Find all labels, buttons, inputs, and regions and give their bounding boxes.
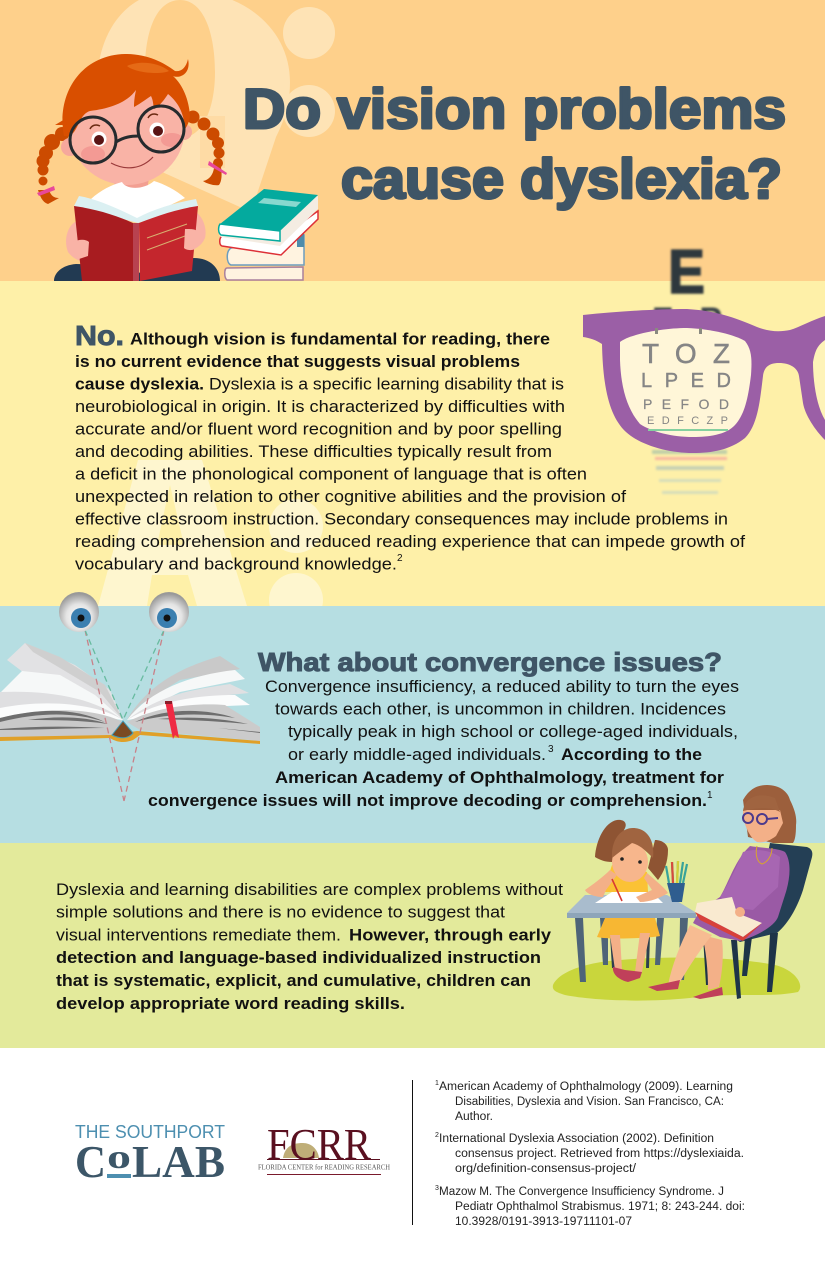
eye chart letters in lens: TOZ [642, 338, 730, 369]
references: consensus project. Retrieved from https://dyslexiaida. [455, 1148, 744, 1160]
references: Disabilities, Dyslexia and Vision. San Francisco, CA: [455, 1096, 724, 1108]
left braid [36, 127, 69, 204]
text block: convergence: typically peak in high school or college-aged individuals, [288, 722, 738, 741]
text block: answer: reading comprehension and reduced reading experience that can impede growth of [75, 532, 745, 551]
child legs [610, 933, 650, 972]
teacher book [695, 897, 762, 937]
teacher glasses [743, 813, 778, 824]
teacher shoes [648, 980, 723, 999]
title: Do vision problems [243, 77, 786, 140]
smile [111, 157, 153, 168]
panel: answer body background [0, 281, 825, 627]
teacher hair [743, 785, 796, 843]
text block: conclusion: However, through early [349, 926, 552, 944]
references: 3 [435, 1185, 439, 1192]
logo: FCRR: FCRR [267, 1120, 372, 1169]
text block: conclusion: simple solutions and there is no evidence to suggest that [56, 902, 505, 922]
chair back [720, 843, 812, 942]
references: 1 [435, 1080, 439, 1087]
eyes [92, 132, 106, 146]
logo: The Southport CoLab: THE SOUTHPORT [75, 1122, 225, 1142]
references: Author. [455, 1111, 493, 1123]
text block: conclusion [56, 880, 563, 1013]
book spine and edge [0, 731, 260, 744]
child dress top [603, 865, 648, 892]
title: cause dyslexia? [341, 147, 782, 210]
text block: answer: cause dyslexia. [75, 374, 204, 394]
child shoes [613, 967, 642, 982]
child head [612, 842, 648, 882]
text block: answer: Dyslexia is a specific learning disability that is [209, 374, 564, 394]
text block: answer: vocabulary and background knowledge. [75, 554, 397, 574]
left eyeball [59, 592, 99, 632]
eye chart letters in lens: EDFCZP [647, 415, 728, 427]
references: Pediatr Ophthalmol Strabismus. 1971; 8: 243-244. doi: [455, 1201, 745, 1213]
blush [81, 146, 105, 162]
text block: answer: Although vision is fundamental for reading, there [130, 330, 550, 348]
text block: convergence: convergence issues will not improve decoding or comprehension. [148, 791, 707, 810]
references: org/definition-consensus-project/ [455, 1163, 637, 1175]
references: American Academy of Ophthalmology (2009). Learning [439, 1081, 733, 1093]
teacher face [743, 810, 783, 842]
text block: conclusion: develop appropriate word reading skills. [56, 994, 405, 1013]
eye chart letters in lens: LPED [641, 370, 731, 392]
eye chart letters in lens [641, 328, 731, 431]
book pages [74, 196, 198, 223]
face [69, 71, 185, 185]
panel: convergence background [0, 606, 825, 843]
text block: answer: 2 [397, 553, 403, 564]
child chair legs [610, 935, 650, 968]
logo: The Southport CoLab: LAB [132, 1136, 225, 1187]
child arms [585, 870, 668, 902]
text block: conclusion: visual interventions remediate them. [56, 926, 341, 944]
paper [595, 892, 663, 903]
text block: conclusion: detection and language-based individualized instruction [56, 948, 541, 967]
panel: conclusion background [0, 843, 825, 1048]
text block: answer: is no current evidence that suggests visual problems [75, 352, 520, 371]
teacher legs [702, 935, 723, 990]
glasses [70, 106, 184, 163]
table top [567, 895, 695, 918]
table back legs [600, 918, 664, 965]
necklace [756, 846, 772, 864]
text block: answer [75, 320, 745, 574]
illustration: stack of books [219, 189, 318, 280]
hair [62, 54, 190, 136]
sight lines [85, 630, 164, 801]
child ponytails [595, 820, 626, 862]
illustration: eye chart: E [668, 238, 705, 307]
text block: convergence: towards each other, is uncommon in children. Incidences [275, 700, 726, 718]
right eyeball [149, 592, 189, 632]
text block: convergence: American Academy of Ophthalmology, treatment for [275, 768, 724, 787]
book cover [74, 206, 133, 281]
shirt [91, 181, 185, 222]
arms [66, 222, 88, 262]
pencil cup [666, 861, 687, 902]
illustration: teacher and child at table [553, 785, 812, 1001]
book pages right [127, 656, 240, 720]
illustration: girl reading with glasses [36, 54, 227, 281]
references [435, 1080, 745, 1228]
references: Mazow M. The Convergence Insufficiency Syndrome. J [439, 1186, 724, 1198]
teacher dress [693, 846, 790, 941]
illustration: eye chart: F P [652, 301, 722, 339]
text block: answer: accurate and/or fluent word recognition and by poor spelling [75, 420, 562, 438]
right braid [186, 110, 224, 185]
child skirt [597, 918, 660, 939]
text block: convergence: 1 [707, 790, 713, 801]
neck [113, 178, 149, 195]
logo: The Southport CoLab: o [107, 1139, 131, 1176]
chair legs [703, 933, 778, 999]
text block: conclusion: that is systematic, explicit, and cumulative, children can [56, 971, 531, 990]
text block: answer: and decoding abilities. These difficulties typically result from [75, 442, 552, 461]
text block: convergence: According to the [561, 745, 702, 764]
table front legs [575, 918, 688, 982]
references: International Dyslexia Association (2002). Definition [439, 1133, 714, 1145]
book pages left [7, 643, 123, 720]
pencil [612, 879, 622, 901]
bookmark [165, 701, 179, 739]
heading: convergence: What about convergence issues? [258, 647, 722, 677]
panel: footer background [0, 1048, 825, 1275]
text block: answer: a deficit in the phonological component of language that is often [75, 464, 587, 484]
hands [73, 229, 197, 259]
title [243, 77, 786, 210]
illustration: purple glasses [583, 309, 825, 453]
logo: The Southport CoLab: C [75, 1136, 106, 1187]
text block: convergence [148, 677, 739, 810]
ears [61, 138, 79, 156]
panel: question header background [0, 0, 825, 281]
illustration: eyes converging on open book [0, 592, 260, 801]
illustration: eye chart [652, 238, 727, 494]
teacher bangs [743, 795, 780, 812]
logo: The Southport CoLab [75, 1122, 225, 1187]
text block: convergence: 3 [548, 744, 554, 755]
text block: convergence: or early middle-aged individuals. [288, 745, 546, 764]
text block: answer: neurobiological in origin. It is characterized by difficulties with [75, 397, 565, 416]
answer word: No: No. [75, 320, 124, 351]
text block: answer: effective classroom instruction. Secondary consequences may include problems in [75, 510, 728, 528]
ground [553, 958, 800, 1001]
logo: FCRR: FLORIDA CENTER for READING RESEARCH [258, 1162, 390, 1172]
text block: conclusion: Dyslexia and learning disabilities are complex problems without [56, 880, 563, 899]
legs [54, 258, 220, 281]
eye chart letters in lens: PEFOD [643, 396, 729, 412]
references: 2 [435, 1132, 439, 1139]
divider [412, 1080, 413, 1225]
text block: convergence: Convergence insufficiency, a reduced ability to turn the eyes [265, 677, 739, 696]
references: 10.3928/0191-3913-19711101-07 [455, 1216, 632, 1228]
text block: answer: unexpected in relation to other cognitive abilities and the provision of [75, 487, 626, 506]
